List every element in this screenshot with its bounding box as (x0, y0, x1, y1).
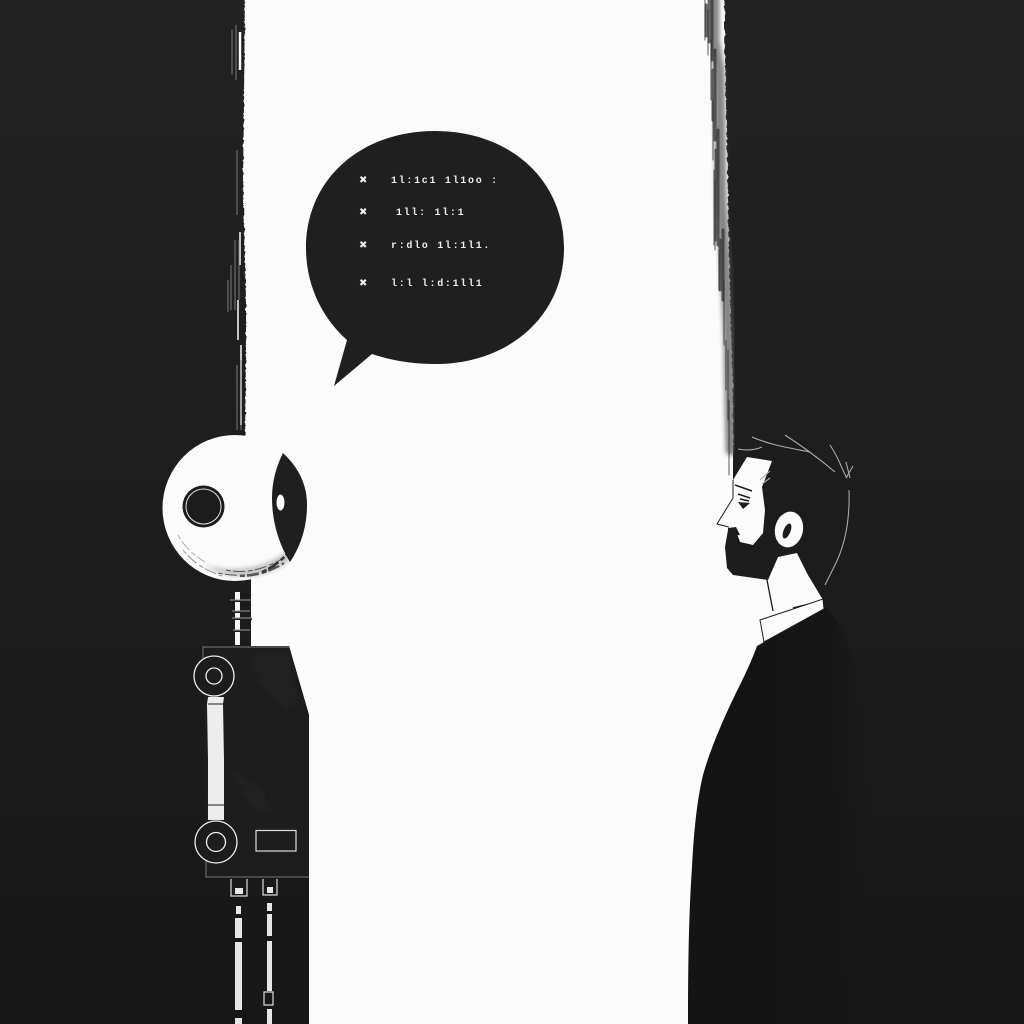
bubble list text: 1l:1c1 1l1oo : (391, 175, 499, 187)
bubble list text: ✖ (359, 208, 369, 219)
man coat (688, 606, 872, 1024)
robot chest panel (256, 830, 296, 851)
man mouth shadow (728, 527, 740, 536)
bubble list text: 1ll: 1l:1 (396, 207, 465, 219)
bubble shape (306, 131, 564, 386)
robot left leg (231, 879, 247, 1024)
man face profile line (717, 480, 733, 527)
robot right leg (263, 879, 277, 1024)
torso texture (232, 652, 298, 815)
speech bubble (306, 131, 564, 386)
bubble list text: r:dlo 1l:1l1. (391, 240, 491, 252)
robot left eye (182, 486, 224, 528)
man eye and brow (735, 485, 752, 501)
man hair strokes (738, 435, 853, 585)
robot neck (230, 578, 252, 650)
man (688, 435, 872, 1024)
robot right eye lens (272, 453, 307, 562)
central white panel (243, 0, 795, 1024)
bubble list text: ✖ (359, 241, 369, 252)
right panel dry brush edge (705, 0, 731, 475)
bubble list text: l:l l:d:1ll1 (391, 278, 483, 290)
left panel dry brush edge (228, 25, 241, 430)
man collar (760, 599, 824, 642)
robot head (162, 435, 308, 581)
robot torso (203, 646, 309, 877)
robot arm (194, 656, 237, 863)
bubble list text (359, 175, 499, 290)
robot (162, 435, 309, 1024)
man neck (768, 552, 823, 612)
man hair and beard (725, 440, 852, 600)
man ear (772, 509, 806, 550)
bubble list text: ✖ (359, 279, 369, 290)
man face (717, 457, 772, 545)
bubble list text: ✖ (359, 176, 369, 187)
head shading (205, 552, 290, 577)
